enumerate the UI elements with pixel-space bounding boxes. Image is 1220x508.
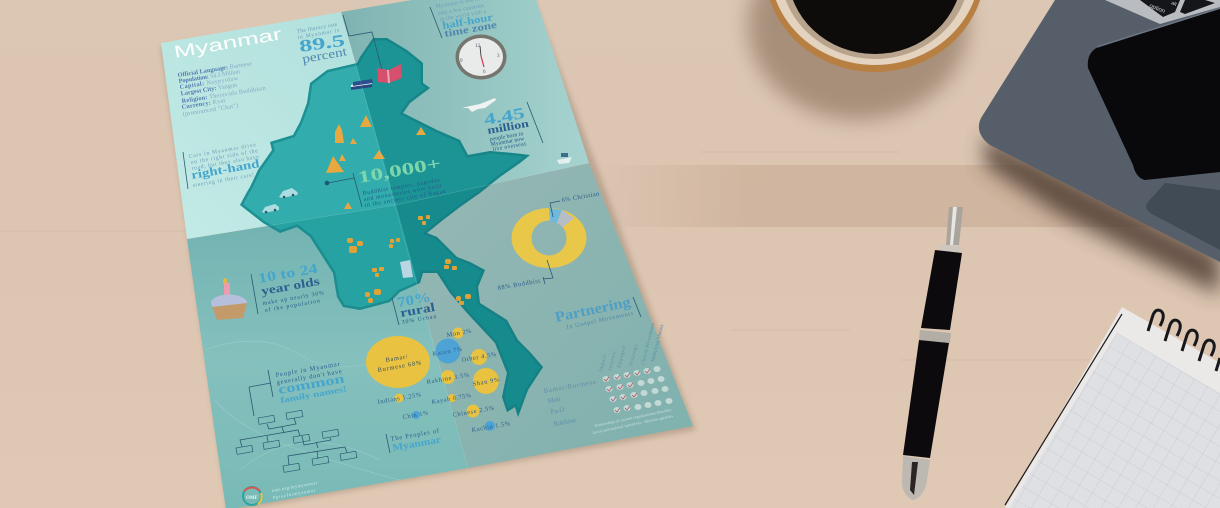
family tree <box>236 410 357 472</box>
partnering table: Bamar/Burmese <box>543 379 597 395</box>
notebook <box>1005 307 1220 508</box>
houses <box>347 215 471 305</box>
icon: clock <box>456 34 506 80</box>
peoples bubble chart: Kayah 0.75% <box>431 392 472 406</box>
logo: OMF <box>246 496 258 501</box>
icon: cupcake <box>211 278 247 320</box>
peoples bubble chart <box>366 328 511 434</box>
family names stat: family names! <box>280 383 348 405</box>
keyboard: alt <box>1170 0 1178 8</box>
partnering table: Multiplying Ministry <box>651 323 665 362</box>
partnering table: Strategy <box>629 343 639 366</box>
right-hand drive stat: right-hand <box>190 156 261 182</box>
right-hand drive stat: Cars in Myanmar drive <box>188 142 257 160</box>
keyboard <box>1105 0 1220 24</box>
bagan stat: Buddhist temples, pagodas <box>362 177 441 197</box>
overseas stat: live overseas <box>492 141 528 153</box>
time zone stat <box>430 0 498 40</box>
coffee cup <box>748 0 985 120</box>
title: Myanmar <box>172 24 284 62</box>
time zone stat: time zone <box>444 20 498 40</box>
peoples bubble chart: Shan 9% <box>472 376 501 388</box>
icon: plane <box>462 98 496 112</box>
youth stat: make up nearly 30% <box>262 290 325 307</box>
youth stat: 10 to 24 <box>257 262 319 287</box>
youth stat: year olds <box>260 274 321 298</box>
partnering table: Impact <box>599 354 608 372</box>
peoples bubble chart: Karen 7% <box>432 346 464 358</box>
peoples heading: The Peoples of <box>390 427 440 443</box>
religion donut chart <box>497 190 601 292</box>
footer links: omf.org/mymyanmar <box>271 480 318 493</box>
country facts: Official Language: Burmese <box>177 60 253 79</box>
bagan stat: and monasteries were built <box>363 183 443 203</box>
right-hand drive stat <box>183 142 261 189</box>
icon: white temple <box>400 260 413 278</box>
partnering table: Pa-O <box>550 407 565 416</box>
peoples bubble chart: Chinese 2.5% <box>452 405 495 419</box>
literacy stat <box>296 15 384 78</box>
rural stat: 70% <box>396 290 432 311</box>
footer links: #prayformyanmar <box>272 488 316 500</box>
right-hand drive stat: road; but they also have <box>191 154 260 172</box>
overseas stat: Myanmar now <box>490 136 526 148</box>
fold highlights <box>187 12 589 468</box>
peoples bubble chart: Kachin 1.5% <box>471 420 511 434</box>
time zone stat: only a few countries <box>437 2 485 17</box>
icon: clock: 3 <box>497 54 500 59</box>
overseas stat <box>483 102 543 153</box>
religion donut chart: 88% Buddhist <box>497 278 541 292</box>
overseas stat: 4.45 <box>483 105 526 129</box>
partnering table: Interest <box>608 350 618 371</box>
family names stat: People in Myanmar <box>275 361 341 379</box>
icon: red book <box>377 64 402 83</box>
rural stat <box>392 290 437 326</box>
peoples heading <box>386 427 442 454</box>
footer links <box>271 480 318 500</box>
map of Myanmar <box>240 38 543 417</box>
icon: boat <box>557 153 572 164</box>
peoples bubble chart: Mon 2% <box>446 328 473 339</box>
panel: bottom right <box>396 163 693 468</box>
literacy stat: The literacy rate <box>296 22 338 35</box>
literacy stat: percent <box>301 44 348 66</box>
partnering table: Local and national initiatives - Mission agencies <box>592 414 674 435</box>
peoples bubble chart: Burmese 68% <box>377 359 422 374</box>
icon: cars <box>262 188 298 213</box>
spiral binding <box>1148 310 1220 371</box>
country facts: Population: 54.3 Million <box>178 68 241 85</box>
time zone stat: half-hour <box>442 12 494 32</box>
bagan stat: 10,000+ <box>356 154 442 187</box>
laptop <box>979 0 1220 295</box>
panel: top left <box>161 12 396 239</box>
peoples bubble chart: Indians 1.25% <box>377 391 422 406</box>
poster <box>161 0 693 508</box>
poster shadow <box>161 0 696 508</box>
bagan stat: in the ancient city of Bagan <box>364 188 446 209</box>
icon: clock: 9 <box>460 59 463 64</box>
peoples bubble chart: Rakhine 3.5% <box>426 371 470 386</box>
peoples heading: Myanmar <box>392 435 442 454</box>
country facts: Capital: Naypyidaw <box>179 75 239 91</box>
partnering heading: In Gospel Movements <box>566 310 634 331</box>
country facts: Religion: Theravada Buddhism <box>181 85 266 105</box>
country facts: (pronounced "Chat") <box>182 102 239 118</box>
rural stat: rural <box>399 300 437 320</box>
panel: bottom left <box>187 205 468 508</box>
time zone stat: in the world with a <box>439 9 487 23</box>
partnering table: Partnerships of current organizations/churches <box>594 408 672 428</box>
overseas stat: million <box>486 118 530 137</box>
pen <box>902 207 963 500</box>
partnering heading <box>554 294 641 331</box>
literacy stat: in Myanmar is <box>297 28 340 41</box>
overseas stat: people born in <box>489 131 524 143</box>
icon: clock: 6 <box>483 70 486 75</box>
country facts <box>177 60 266 118</box>
religion donut chart: 6% Christian <box>561 190 601 204</box>
right-hand drive stat: steering in their cars! <box>192 172 255 189</box>
family names stat: generally don't have <box>276 368 342 386</box>
peoples bubble chart: Bamar/ <box>385 353 408 364</box>
icon: stacked books <box>351 79 373 90</box>
pagodas <box>326 115 426 209</box>
phone <box>1088 9 1220 180</box>
partnering table: Church Movements <box>641 323 656 365</box>
rural stat: 30% Urban <box>401 314 437 326</box>
youth stat <box>251 262 325 314</box>
partnering table: Mon <box>547 396 562 405</box>
trackpad <box>1146 183 1220 250</box>
contour decoration <box>205 341 420 480</box>
country facts: Largest City: Yangon <box>180 82 238 97</box>
peoples bubble chart: Other 4.5% <box>461 351 497 364</box>
logo <box>243 487 262 505</box>
youth stat: of the population <box>264 297 321 314</box>
family names stat: common <box>277 370 347 397</box>
partnering table <box>543 323 674 435</box>
partnering heading: Partnering <box>554 294 633 326</box>
keyboard: option <box>1148 3 1166 15</box>
partnering table: Rakhine <box>553 417 577 428</box>
literacy stat: 89.5 <box>298 31 346 56</box>
peoples bubble chart: Chin 1% <box>402 409 430 421</box>
bagan stat <box>325 154 446 209</box>
icon: clock: 12 <box>475 44 480 49</box>
family names stat <box>249 361 348 416</box>
partnering table: Engaged <box>617 345 627 368</box>
right-hand drive stat: on the right side of the <box>190 147 259 166</box>
panel: top right <box>341 0 589 205</box>
country facts: Currency: Kyat <box>181 97 226 111</box>
